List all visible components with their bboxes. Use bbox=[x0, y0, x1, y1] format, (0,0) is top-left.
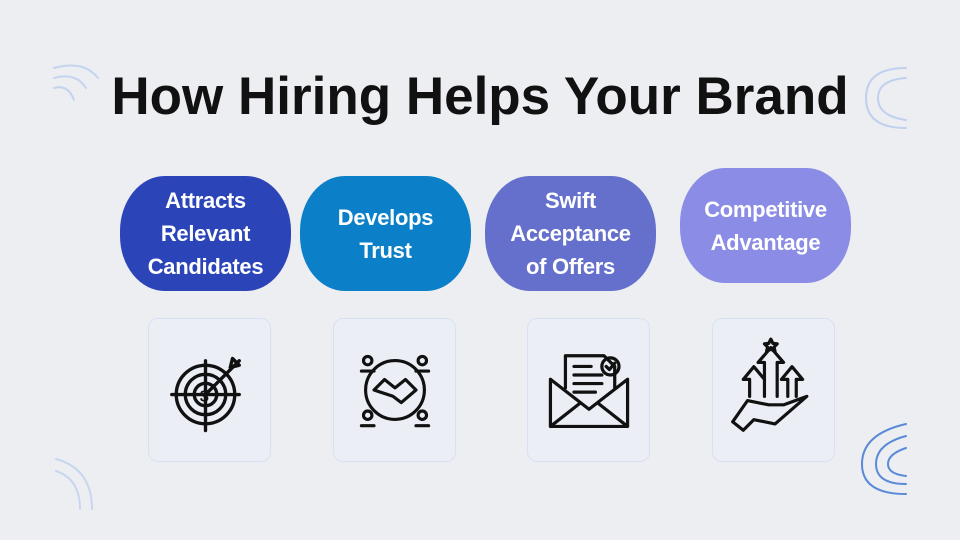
pill: competitive bbox=[680, 168, 851, 283]
pill: attracts: Candidates bbox=[148, 254, 263, 279]
pill: swift: Swift bbox=[545, 188, 596, 213]
pill: attracts: Relevant bbox=[161, 221, 250, 246]
pill: swift: Acceptance bbox=[510, 221, 631, 246]
pill: attracts: Attracts bbox=[165, 188, 246, 213]
pill: trust bbox=[300, 176, 471, 291]
card: target icon: $ bbox=[199, 388, 208, 405]
pill: trust: Develops bbox=[338, 204, 433, 230]
pill: swift: of Offers bbox=[526, 254, 615, 279]
decor: bottom left swirl bbox=[55, 458, 93, 510]
decor: right swirl bbox=[865, 67, 907, 129]
card: target icon bbox=[148, 318, 271, 462]
pill: attracts bbox=[120, 176, 291, 291]
pill: competitive: Competitive bbox=[704, 196, 827, 222]
pill: competitive: Advantage bbox=[711, 230, 820, 254]
pill: swift bbox=[485, 176, 656, 291]
card: handshake icon bbox=[333, 318, 456, 462]
card: growth hand icon bbox=[712, 318, 835, 462]
card: envelope icon bbox=[527, 318, 650, 462]
pill: trust: Trust bbox=[359, 238, 412, 262]
title: How Hiring Helps Your Brand bbox=[111, 67, 849, 126]
decor: top-left lines bbox=[53, 64, 99, 101]
decor: bottom right swirl bbox=[861, 423, 907, 495]
